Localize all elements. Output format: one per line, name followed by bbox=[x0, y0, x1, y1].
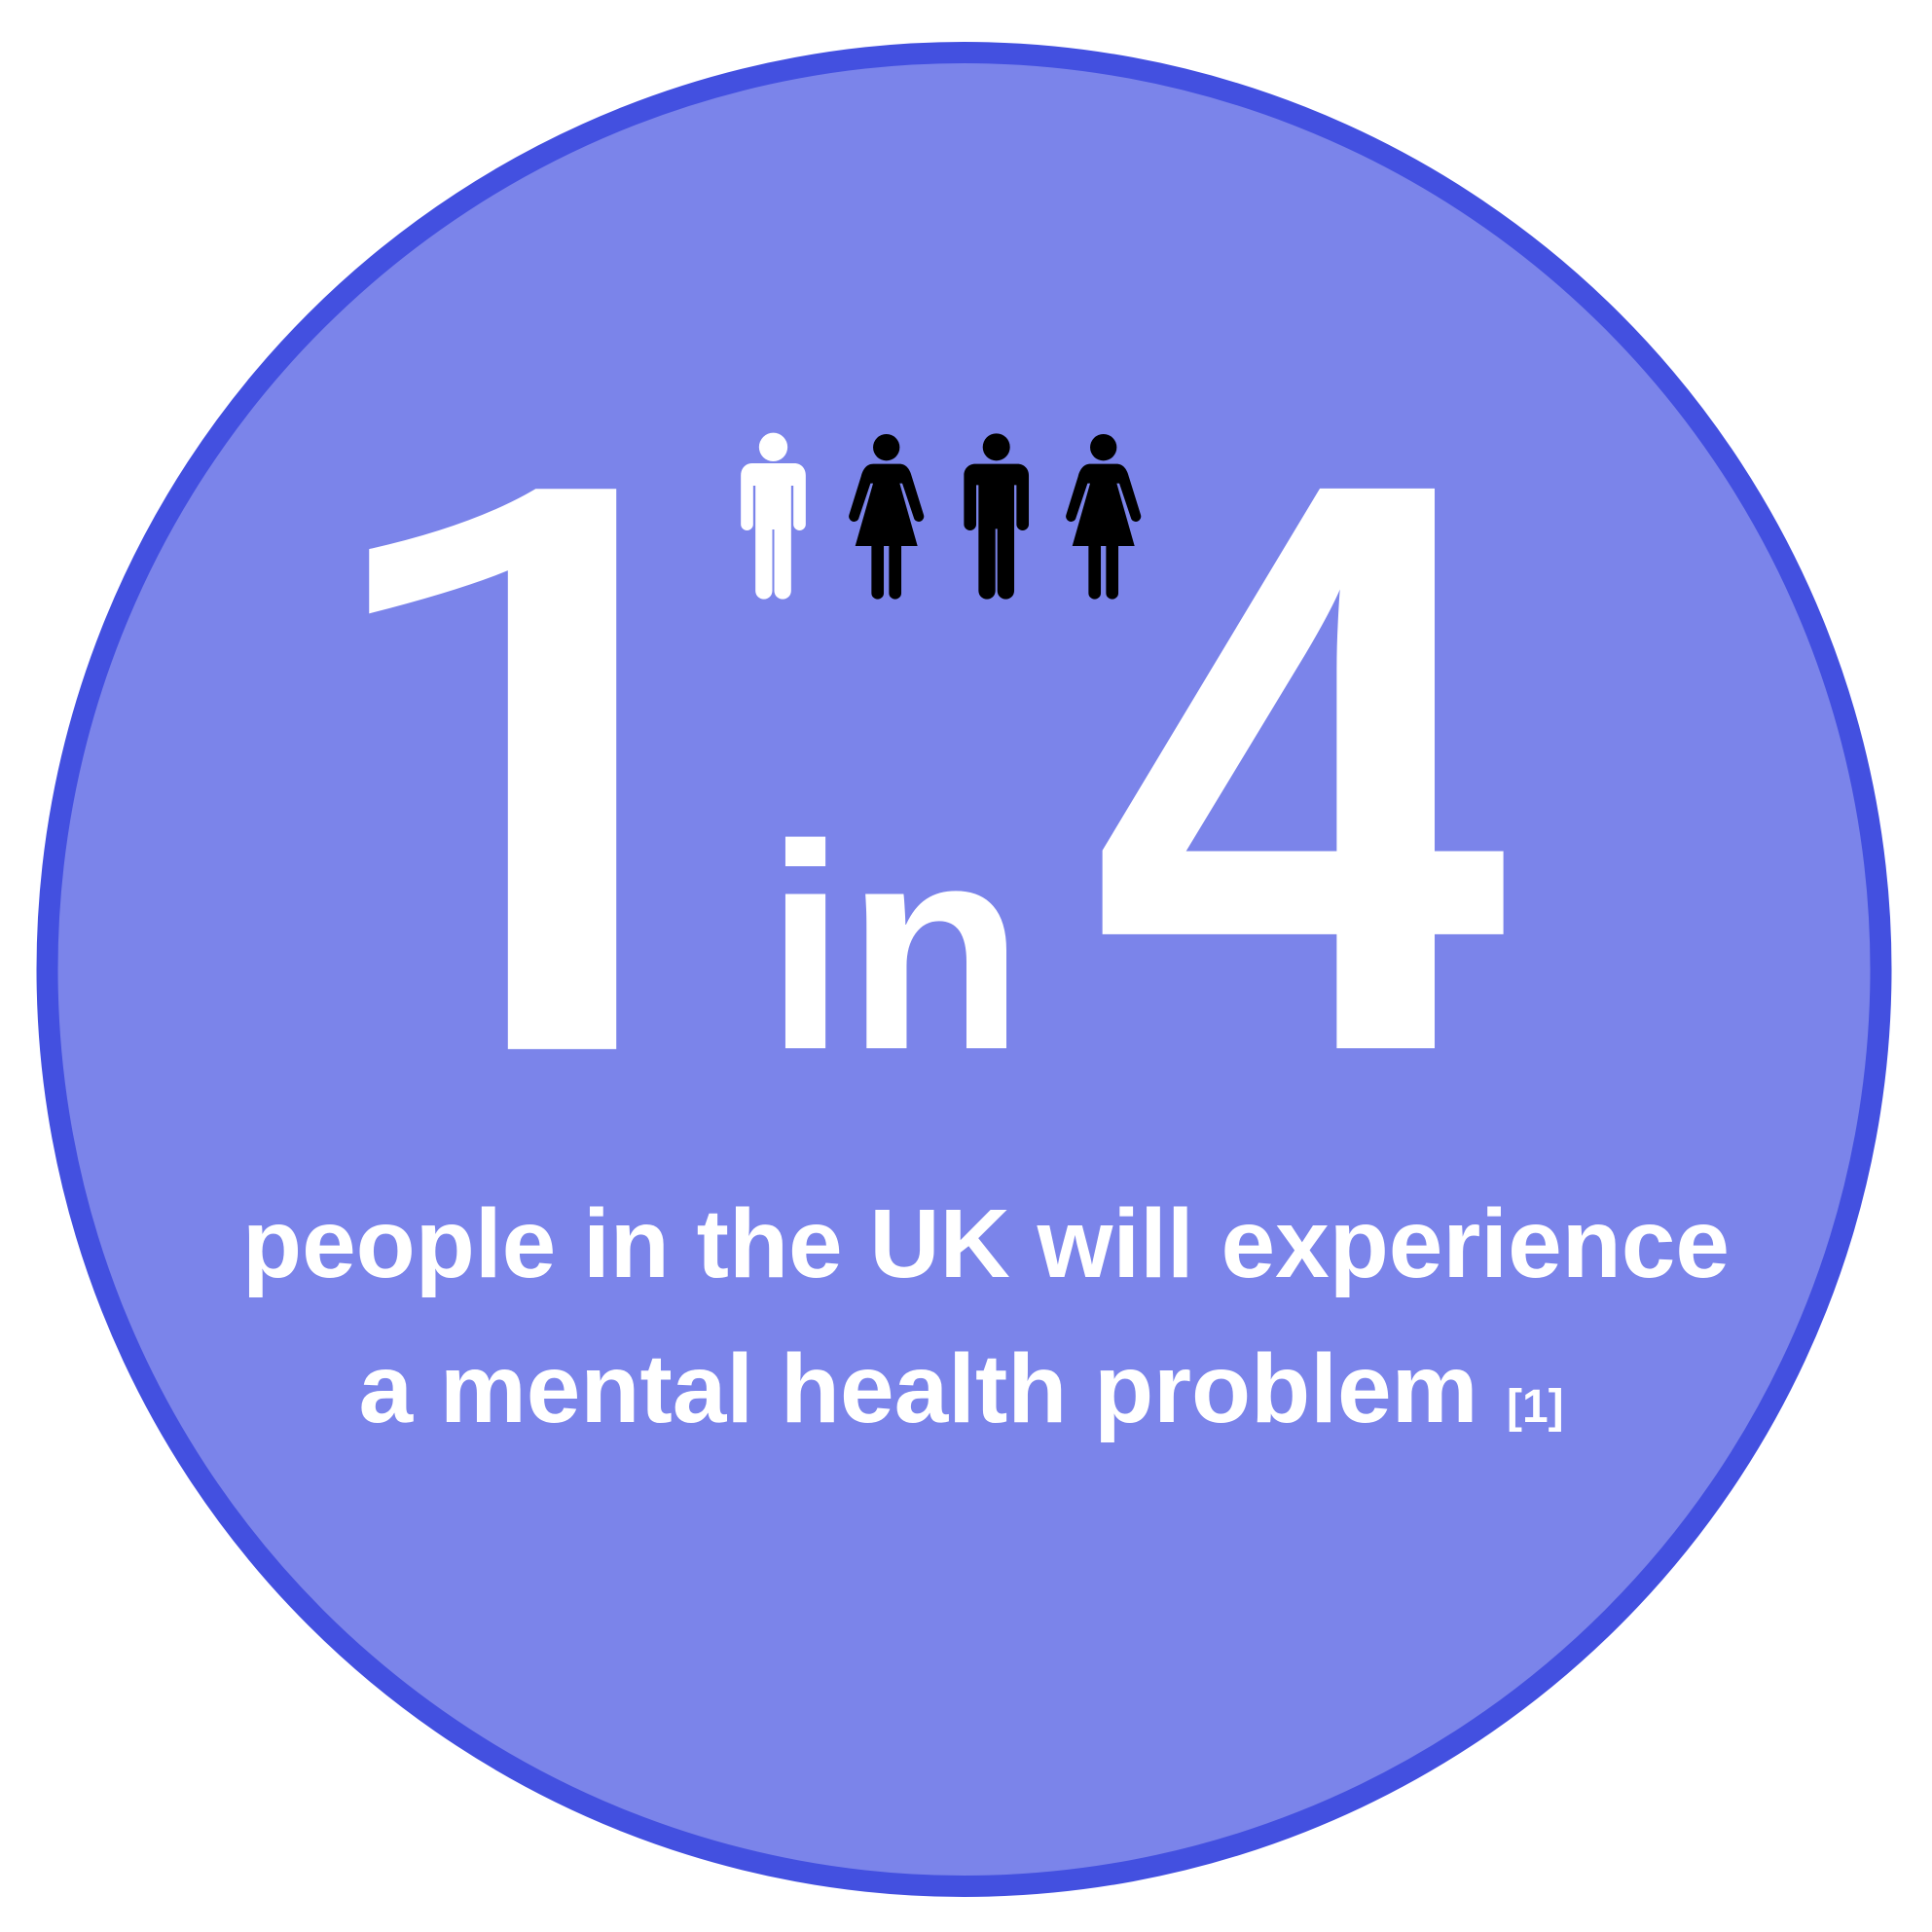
caption line 1: people in the UK will experience bbox=[242, 1189, 1730, 1298]
big number 1: 1 bbox=[213, 385, 874, 1185]
footnote reference: [1] bbox=[1507, 1381, 1564, 1433]
icon: white man bbox=[741, 433, 806, 600]
big number 4: 4 bbox=[1091, 312, 1513, 1221]
icon: black woman bbox=[1066, 434, 1141, 600]
caption line 2: a mental health problem bbox=[358, 1334, 1477, 1443]
icon: black man bbox=[964, 433, 1029, 600]
icon: black woman bbox=[849, 434, 924, 600]
word in: in bbox=[765, 784, 1025, 1111]
